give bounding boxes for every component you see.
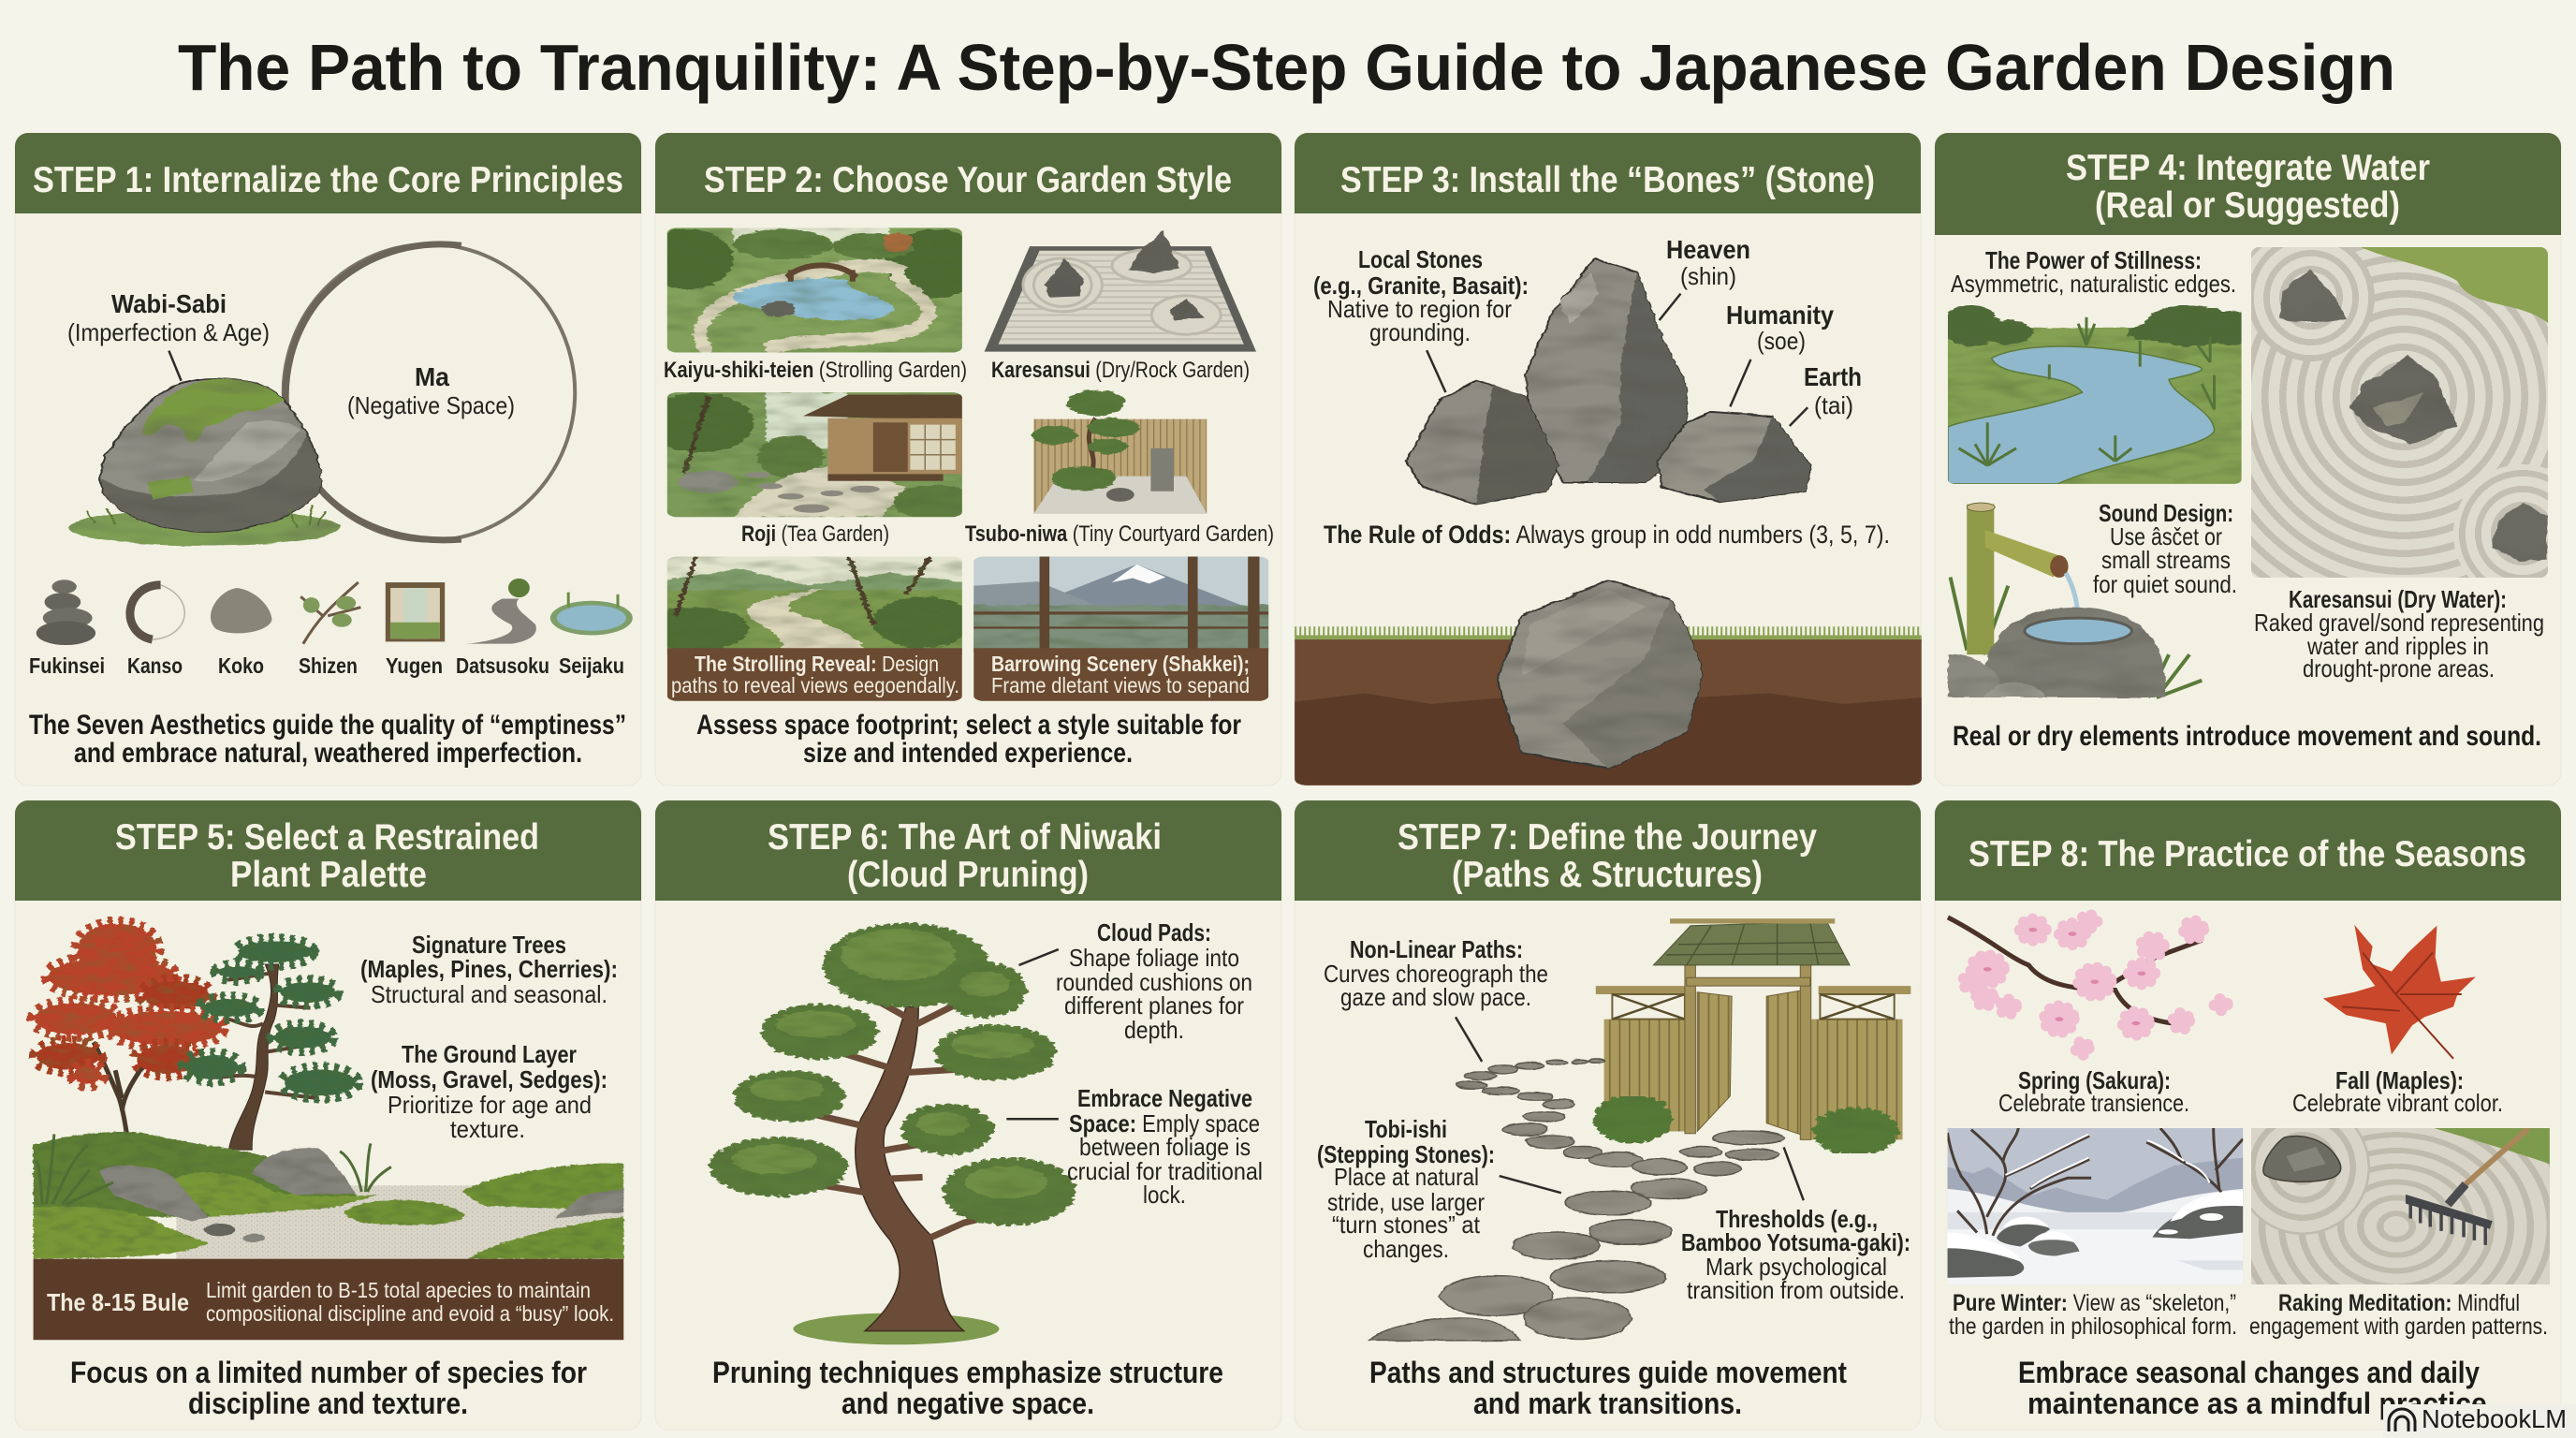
header: step 7 [1295, 800, 1921, 901]
illustration: three stone triad [1406, 258, 1810, 505]
note: step 7 [1369, 1356, 1847, 1420]
style captions: Roji (Tea Garden) [741, 521, 889, 547]
labels: water: The Power of Stillness: [1985, 246, 2202, 274]
callout: 8-15 rule: compositional discipline and evoid a “busy” look. [206, 1301, 614, 1326]
header: step 5: Plant Palette [230, 855, 427, 895]
labels: paths: Non-Linear Paths: [1350, 935, 1523, 963]
leader lines: triad labels [1427, 294, 1808, 426]
panel: step 8 seasons [1935, 800, 2574, 1430]
illustration: cherry branch [1948, 915, 2228, 1055]
caption band: strolling reveal: paths to reveal views eegoendally. [671, 673, 959, 697]
labels: paths: Tobi-ishi [1365, 1115, 1447, 1143]
callout: 8-15 rule: Limit garden to B-15 total apecies to maintain [206, 1278, 591, 1302]
labels: niwaki: rounded cushions on [1056, 968, 1252, 996]
header: step 5: STEP 5: Select a Restrained [115, 817, 539, 858]
leader line: wabi-sabi [168, 351, 182, 381]
note: step 5: discipline and texture. [188, 1387, 468, 1420]
labels: niwaki: Space: Emply space [1069, 1109, 1260, 1137]
garden style illustrations [635, 223, 1277, 702]
labels: water: Use âsčet or [2110, 522, 2222, 550]
labels: water: for quiet sound. [2093, 570, 2237, 598]
labels: water: Asymmetric, naturalistic edges. [1951, 270, 2236, 298]
header: step 2: STEP 2: Choose Your Garden Style [704, 160, 1232, 200]
aesthetics labels: Koko [218, 653, 264, 678]
panel: step 7 paths [1295, 800, 1921, 1430]
labels: stones: Native to region for [1327, 295, 1512, 323]
note: step 7: Paths and structures guide movement [1369, 1356, 1847, 1389]
panel: step 2 garden style [635, 133, 1281, 785]
labels: paths: (Stepping Stones): [1317, 1140, 1495, 1168]
labels: paths: Thresholds (e.g., [1716, 1205, 1878, 1233]
labels: niwaki: lock. [1143, 1181, 1186, 1209]
aesthetics labels: Datsusoku [456, 653, 549, 678]
panel: step 5 plants [15, 800, 641, 1430]
illustration: garden with maple and pine [34, 924, 623, 1340]
panel: step 4 water [1935, 125, 2576, 785]
labels: niwaki: between foliage is [1079, 1133, 1251, 1161]
labels: stones: (tai) [1814, 391, 1853, 419]
labels: plants [360, 931, 618, 1143]
note: step 1: The Seven Aesthetics guide the quality of “emptiness” [29, 710, 626, 741]
illustration: bamboo gate [1369, 918, 1910, 1341]
labels: water: Sound Design: [2099, 499, 2233, 527]
labels: stones: Earth [1804, 362, 1862, 391]
note: step 2: Assess space footprint; select a style suitable for [696, 710, 1241, 741]
labels: plants: Signature Trees [412, 931, 566, 959]
leader lines: path labels [1456, 1017, 1804, 1200]
labels: plants: texture. [450, 1115, 525, 1143]
header: step 7: STEP 7: Define the Journey [1398, 817, 1817, 858]
header: step 4: (Real or Suggested) [2095, 185, 2400, 226]
labels: spring and fall [1998, 1066, 2503, 1117]
labels: paths [1317, 935, 1910, 1304]
note: step 8: Embrace seasonal changes and daily [2018, 1356, 2480, 1389]
label: Wabi-Sabi: (Imperfection & Age) [67, 318, 270, 346]
caption band: borrowing scenery: Barrowing Scenery (Shakkei); [991, 652, 1250, 676]
illustration: cloud pruned tree [714, 928, 1071, 1344]
note: step 6: and negative space. [842, 1387, 1094, 1420]
note: step 2 [696, 710, 1241, 769]
labels: stones: (e.g., Granite, Basait): [1313, 271, 1529, 300]
labels: winter and raking: Raking Meditation: Mindful [2278, 1290, 2520, 1316]
header: step 4: STEP 4: Integrate Water [2066, 148, 2430, 188]
note: step 8 [2018, 1356, 2495, 1420]
gravel bed [176, 1185, 623, 1259]
labels: stones: Heaven [1666, 235, 1750, 264]
labels: niwaki: crucial for traditional [1067, 1157, 1263, 1185]
note: step 1 [29, 710, 626, 769]
illustration: ensō ring [284, 244, 575, 541]
labels: niwaki: depth. [1124, 1016, 1184, 1044]
header: step 1 [15, 133, 641, 213]
illustration: dry water raked gravel [2251, 247, 2548, 578]
illustration: half-buried stone in soil [1295, 580, 1922, 785]
note: step 7: and mark transitions. [1473, 1387, 1742, 1420]
aesthetics labels: Seijaku [559, 653, 624, 678]
header: step 6: STEP 6: The Art of Niwaki [768, 817, 1162, 858]
labels: spring and fall: Celebrate vibrant color. [2292, 1089, 2503, 1117]
labels: niwaki: Cloud Pads: [1097, 918, 1211, 946]
header: step 4 [1935, 133, 2561, 235]
labels: niwaki: Shape foliage into [1069, 944, 1239, 972]
icon: NotebookLM arcs [2389, 1409, 2415, 1431]
labels: paths: transition from outside. [1687, 1276, 1905, 1304]
illustration: raking meditation [2251, 1128, 2550, 1284]
caption band: strolling reveal: The Strolling Reveal: Design [695, 652, 939, 676]
header: step 6 [655, 800, 1281, 901]
labels: plants: (Maples, Pines, Cherries): [360, 955, 618, 983]
labels: paths: changes. [1363, 1235, 1449, 1263]
header: step 1: STEP 1: Internalize the Core Principles [33, 160, 623, 200]
note: step 6 [712, 1356, 1223, 1420]
aesthetics labels: Kanso [127, 653, 183, 678]
labels: plants: The Ground Layer [402, 1040, 577, 1068]
text: rule of odds: The Rule of Odds: Always group in odd numbers (3, 5, 7). [1324, 521, 1890, 549]
labels: stones: Local Stones [1358, 245, 1483, 273]
illustration: mossy boulder [68, 378, 340, 546]
note: step 5 [70, 1356, 587, 1420]
labels: paths: “turn stones” at [1332, 1211, 1481, 1239]
illustration: natural pond [1938, 305, 2256, 489]
note: step 1: and embrace natural, weathered imperfection. [74, 738, 582, 769]
labels: spring and fall: Spring (Sakura): [2018, 1066, 2171, 1094]
labels: water: water and ripples in [2306, 632, 2489, 660]
watermark: NotebookLM [2383, 1404, 2576, 1438]
panel: step 1 core principles [15, 133, 641, 785]
labels: paths: Place at natural [1334, 1163, 1479, 1191]
illustration: maple leaf [2323, 925, 2476, 1059]
labels: water: drought-prone areas. [2303, 654, 2495, 682]
labels: spring and fall: Fall (Maples): [2335, 1066, 2464, 1094]
illustration: winter scene [1948, 1128, 2243, 1284]
labels: winter and raking: the garden in philosophical form. [1949, 1313, 2237, 1340]
labels: plants: (Moss, Gravel, Sedges): [371, 1065, 607, 1093]
labels: water: Karesansui (Dry Water): [2289, 585, 2507, 613]
maple tree [35, 924, 222, 1148]
labels: paths: stride, use larger [1327, 1188, 1485, 1216]
labels: paths: Mark psychological [1705, 1253, 1887, 1281]
callout: 8-15 rule [47, 1278, 614, 1326]
labels: niwaki [1056, 918, 1263, 1209]
leader lines: niwaki labels [1006, 949, 1059, 1119]
style captions [664, 358, 1274, 547]
aesthetics labels: Shizen [299, 653, 358, 678]
header: step 3: STEP 3: Install the “Bones” (Stone) [1340, 160, 1875, 200]
label: Ma: Ma [415, 362, 449, 391]
panel: step 6 niwaki [655, 800, 1281, 1430]
labels: stones: (soe) [1757, 327, 1806, 355]
illustration: bamboo fountain [1948, 503, 2202, 697]
label: Ma: (Negative Space) [347, 391, 515, 419]
labels: water: small streams [2101, 546, 2231, 574]
labels: winter and raking: Pure Winter: View as “skeleton,” [1953, 1290, 2236, 1316]
note: step 2: size and intended experience. [803, 738, 1133, 769]
labels: water [1951, 246, 2544, 682]
label: Wabi-Sabi: Wabi-Sabi [111, 289, 227, 318]
header: step 5 [15, 800, 641, 901]
labels: niwaki: different planes for [1064, 991, 1244, 1020]
note: step 6: Pruning techniques emphasize structure [712, 1356, 1223, 1389]
pine tree [185, 941, 356, 1150]
style captions: Tsubo-niwa (Tiny Courtyard Garden) [965, 521, 1274, 547]
callout: 8-15 rule: The 8-15 Bule [47, 1288, 189, 1316]
label: Wabi-Sabi [67, 289, 270, 346]
caption band: borrowing scenery: Frame dletant views to sepand [991, 673, 1250, 697]
labels: stones: grounding. [1369, 318, 1471, 346]
label: Ma [347, 362, 515, 419]
labels: winter and raking [1949, 1290, 2548, 1340]
header: step 3 [1295, 133, 1921, 213]
aesthetics labels: Fukinsei [29, 653, 105, 678]
watermark: NotebookLM: NotebookLM [2422, 1404, 2567, 1433]
seven aesthetics icons [37, 579, 633, 645]
labels: niwaki: Embrace Negative [1077, 1084, 1252, 1112]
moss ground and rocks [34, 1132, 623, 1259]
labels: stones: (shin) [1680, 262, 1736, 290]
labels: plants: Prioritize for age and [388, 1091, 592, 1119]
labels: paths: gaze and slow pace. [1340, 983, 1531, 1011]
labels: spring and fall: Celebrate transience. [1998, 1089, 2189, 1117]
header: step 2 [655, 133, 1281, 213]
caption band: borrowing scenery [991, 652, 1250, 697]
caption band: strolling reveal [671, 652, 959, 697]
labels: paths: Bamboo Yotsuma-gaki): [1681, 1228, 1910, 1256]
note: step 5: Focus on a limited number of species for [70, 1356, 587, 1389]
title: The Path to Tranquility: A Step-by-Step Guide to Japanese Garden Design [178, 31, 2395, 104]
header: step 7: (Paths & Structures) [1452, 855, 1763, 895]
style captions: Kaiyu-shiki-teien (Strolling Garden) [664, 358, 967, 383]
note: step 8: maintenance as a mindful practice. [2027, 1387, 2495, 1420]
labels: stones [1313, 235, 1862, 419]
header: step 6: (Cloud Pruning) [847, 855, 1089, 895]
aesthetics labels: Yugen [386, 653, 443, 678]
labels: stones: Humanity [1726, 301, 1834, 330]
labels: paths: Curves choreograph the [1324, 960, 1548, 988]
style captions: Karesansui (Dry/Rock Garden) [991, 358, 1250, 383]
aesthetics labels [29, 653, 624, 678]
header: step 8 [1935, 800, 2561, 901]
soil band [34, 1259, 623, 1340]
labels: plants: Structural and seasonal. [371, 980, 607, 1008]
panel: step 3 stones [1295, 133, 1922, 785]
